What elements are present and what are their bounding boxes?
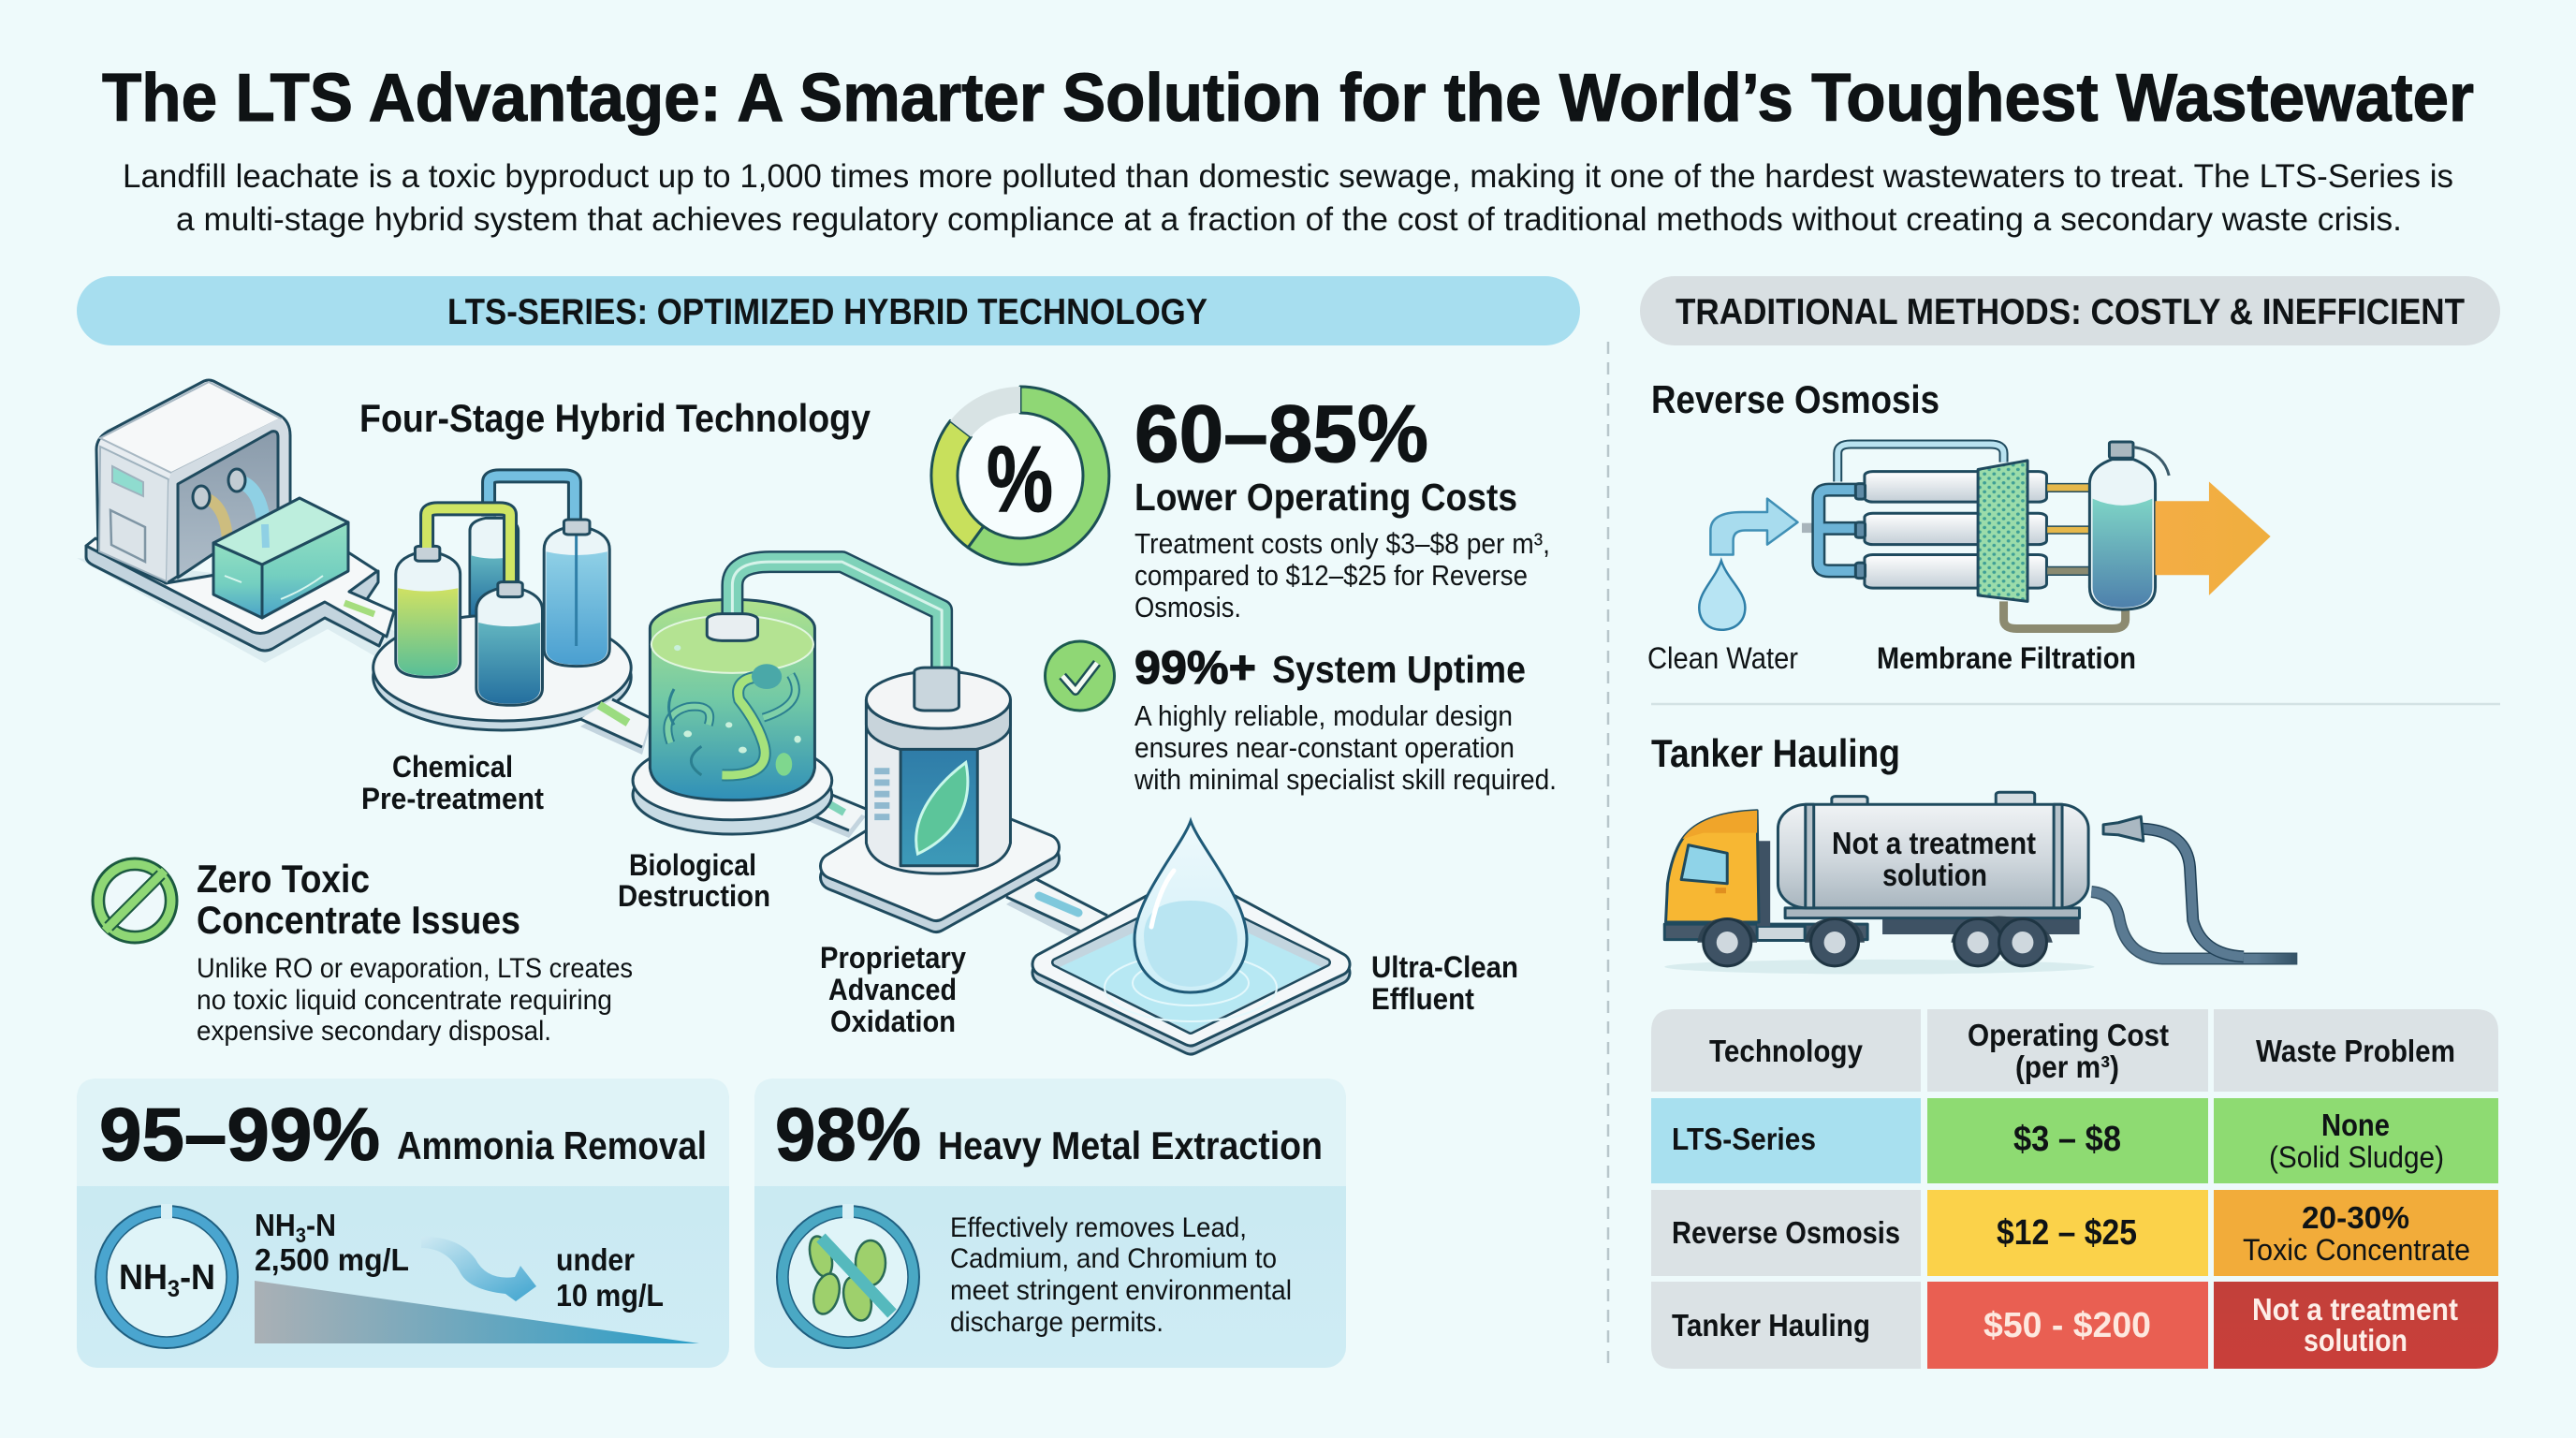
- heading: tanker hauling: Tanker Hauling: [1651, 731, 1900, 775]
- icon: NH3-N ring: [95, 1204, 238, 1348]
- stat: system uptime: A highly reliable, modular design: [1134, 699, 1513, 732]
- tube: blue: [489, 476, 575, 522]
- table row: LTS-Series: (Solid Sludge): [2269, 1140, 2444, 1174]
- arrow: reduction: [421, 1237, 536, 1301]
- stage labels: Destruction: [618, 879, 770, 913]
- diagram: reverse osmosis: [1699, 442, 2271, 630]
- table row: LTS-Series: $3 – $8: [2013, 1120, 2121, 1159]
- panel: ammonia removal: 3: [296, 1224, 306, 1247]
- stat: lower operating costs: [1134, 389, 1550, 624]
- stage labels: Proprietary: [820, 941, 966, 975]
- panel: ammonia removal: under: [556, 1242, 635, 1277]
- table header row: Waste Problem: [2256, 1034, 2455, 1068]
- process diagram: [77, 380, 1339, 1043]
- illustration: tanker truck: [1664, 792, 2297, 975]
- product bottle: [2089, 442, 2169, 609]
- panel: heavy metal extraction: Heavy Metal Extraction: [938, 1123, 1323, 1167]
- stat: lower operating costs: compared to $12–$25 for Reverse: [1134, 559, 1528, 592]
- table row: Tanker Hauling: Tanker Hauling: [1672, 1308, 1870, 1343]
- table row: LTS-Series: LTS-Series: [1672, 1122, 1816, 1156]
- stat: lower operating costs: Osmosis.: [1134, 591, 1241, 624]
- panel: ammonia removal: Ammonia Removal: [397, 1123, 707, 1167]
- water drop: [1134, 821, 1247, 992]
- stat: system uptime: System Uptime: [1272, 648, 1526, 691]
- panel: heavy metal extraction: discharge permits.: [950, 1307, 1164, 1338]
- panel: ammonia removal: 10 mg/L: [556, 1278, 664, 1313]
- icon: clean water drop and arrow: [1699, 499, 1797, 630]
- heading: reverse osmosis: Reverse Osmosis: [1651, 377, 1939, 421]
- section header: LTS-Series: LTS-SERIES: OPTIMIZED HYBRID TECHNOLOGY: [447, 292, 1208, 332]
- panel: heavy metal extraction: meet stringent environmental: [950, 1275, 1292, 1306]
- labels: reverse osmosis: Clean Water: [1647, 641, 1798, 675]
- bottle: blue: [544, 520, 609, 667]
- stage labels: Chemical: [392, 750, 513, 784]
- wheels: [1697, 917, 2053, 966]
- section header: traditional methods: [1640, 276, 2500, 345]
- bottle: back tall: [470, 518, 519, 615]
- section header: traditional methods: TRADITIONAL METHODS: COSTLY & INEFFICIENT: [1676, 292, 2465, 332]
- panel: heavy metal extraction: Cadmium, and Chromium to: [950, 1243, 1277, 1274]
- panel: heavy metal extraction: Effectively removes Lead,: [950, 1212, 1247, 1243]
- stat: lower operating costs: 60–85%: [1134, 389, 1428, 479]
- table row: Tanker Hauling: $50 - $200: [1983, 1306, 2151, 1345]
- stage 1: leachate intake machine and tank: [77, 380, 407, 667]
- labels: reverse osmosis: [1647, 641, 2136, 675]
- icon: NH3-N ring: 3: [168, 1276, 180, 1302]
- bottom return pipe: [2004, 601, 2126, 628]
- stat: system uptime: 99%+: [1134, 641, 1256, 694]
- table row: Reverse Osmosis: [1651, 1190, 2498, 1276]
- table header row: Technology: [1709, 1034, 1864, 1068]
- stage 2: chemical pre-treatment: [373, 476, 631, 730]
- stage labels: [361, 750, 1518, 1038]
- stage labels: Pre-treatment: [361, 782, 544, 815]
- stage labels: Biological: [629, 848, 756, 882]
- callout: zero toxic concentrate: [197, 857, 633, 1047]
- table row: Reverse Osmosis: 20-30%: [2302, 1200, 2409, 1235]
- stat: lower operating costs: Lower Operating Costs: [1134, 476, 1517, 519]
- panel: heavy metal extraction: [754, 1078, 1346, 1368]
- panel: ammonia removal: -N: [306, 1208, 336, 1242]
- manifold pipes: [1819, 490, 1859, 571]
- membrane cylinders: [1865, 472, 2046, 588]
- intro text: [123, 158, 2453, 238]
- table header row: Operating Cost: [1968, 1018, 2169, 1052]
- stage labels: Advanced: [828, 973, 957, 1006]
- icon: check badge: [1045, 641, 1114, 711]
- comparison table: [1651, 1009, 2498, 1369]
- callout: zero toxic concentrate: expensive secondary disposal.: [197, 1016, 551, 1047]
- panel: ammonia removal: 95–99%: [99, 1093, 380, 1176]
- table row: Reverse Osmosis: Reverse Osmosis: [1672, 1215, 1900, 1250]
- icon: NH3-N ring: NH: [119, 1258, 170, 1298]
- membrane panel: [1978, 461, 2027, 601]
- icon: prohibited sign: [93, 858, 177, 943]
- table row: Reverse Osmosis: $12 – $25: [1997, 1213, 2137, 1253]
- panel: heavy metal extraction: 98%: [775, 1093, 921, 1176]
- illustration: tanker truck: Not a treatment: [1832, 826, 2036, 860]
- chassis: [1882, 918, 2080, 934]
- intro text: a multi-stage hybrid system that achieves regulatory compliance at a fraction of the cost of traditional methods without creating a secondary waste crisis.: [176, 201, 2402, 238]
- illustration: tanker truck: solution: [1882, 858, 1987, 892]
- stage: effluent pool: [1044, 821, 1339, 1043]
- callout: zero toxic concentrate: Zero Toxic: [197, 857, 370, 901]
- bottle: dark blue: [476, 582, 542, 705]
- table row: Tanker Hauling: solution: [2304, 1323, 2408, 1357]
- stage labels: Oxidation: [830, 1005, 956, 1038]
- bottle: yellow-green: [396, 546, 461, 677]
- stage labels: Effluent: [1371, 982, 1474, 1016]
- callout: zero toxic concentrate: no toxic liquid concentrate requiring: [197, 985, 612, 1016]
- arrow: orange output: [2156, 481, 2271, 595]
- table row: LTS-Series: [1651, 1098, 2498, 1183]
- table row: Tanker Hauling: [1651, 1282, 2498, 1369]
- panel: ammonia removal: NH: [255, 1208, 300, 1242]
- channels and column base: [580, 699, 1107, 940]
- intro text: Landfill leachate is a toxic byproduct up to 1,000 times more polluted than domestic sewage, making it one of the hardest wastewaters to treat. The LTS-Series is: [123, 158, 2453, 195]
- stat: system uptime: [1134, 641, 1557, 796]
- tube: teal: [732, 562, 942, 675]
- wedge chart: [255, 1281, 699, 1343]
- tube: yellow-green: [427, 508, 510, 587]
- icon: NH3-N ring: -N: [180, 1258, 215, 1298]
- icon: percent donut: %: [987, 427, 1053, 532]
- stage labels: Ultra-Clean: [1371, 950, 1518, 984]
- section header: LTS-Series: [77, 276, 1580, 345]
- table row: Reverse Osmosis: Toxic Concentrate: [2243, 1233, 2470, 1267]
- stat: lower operating costs: Treatment costs only $3–$8 per m³,: [1134, 527, 1550, 560]
- table row: Tanker Hauling: Not a treatment: [2252, 1292, 2458, 1327]
- cab: [1666, 811, 1759, 922]
- panel: ammonia removal: 2,500 mg/L: [255, 1242, 409, 1277]
- stage 3 and 4: biological destruction, advanced oxidation: [633, 562, 1010, 873]
- callout: zero toxic concentrate: Unlike RO or evaporation, LTS creates: [197, 953, 633, 984]
- title: The LTS Advantage: A Smarter Solution for the World’s Toughest Wastewater: [102, 61, 2474, 136]
- table header row: (per m³): [2015, 1049, 2119, 1084]
- connectors: [2046, 484, 2089, 575]
- icon: no heavy metals: [777, 1204, 919, 1348]
- stat: system uptime: ensures near-constant operation: [1134, 731, 1515, 764]
- stat: system uptime: with minimal specialist skill required.: [1134, 763, 1557, 796]
- icon: percent donut: [931, 387, 1109, 565]
- hoses: [2091, 891, 2297, 959]
- heading: four-stage: Four-Stage Hybrid Technology: [359, 396, 871, 440]
- callout: zero toxic concentrate: Concentrate Issues: [197, 898, 520, 942]
- tank: [1832, 797, 1867, 809]
- table header row: [1651, 1009, 2498, 1092]
- labels: reverse osmosis: Membrane Filtration: [1877, 641, 2136, 675]
- table row: LTS-Series: None: [2321, 1108, 2390, 1142]
- panel: ammonia removal: [77, 1078, 729, 1368]
